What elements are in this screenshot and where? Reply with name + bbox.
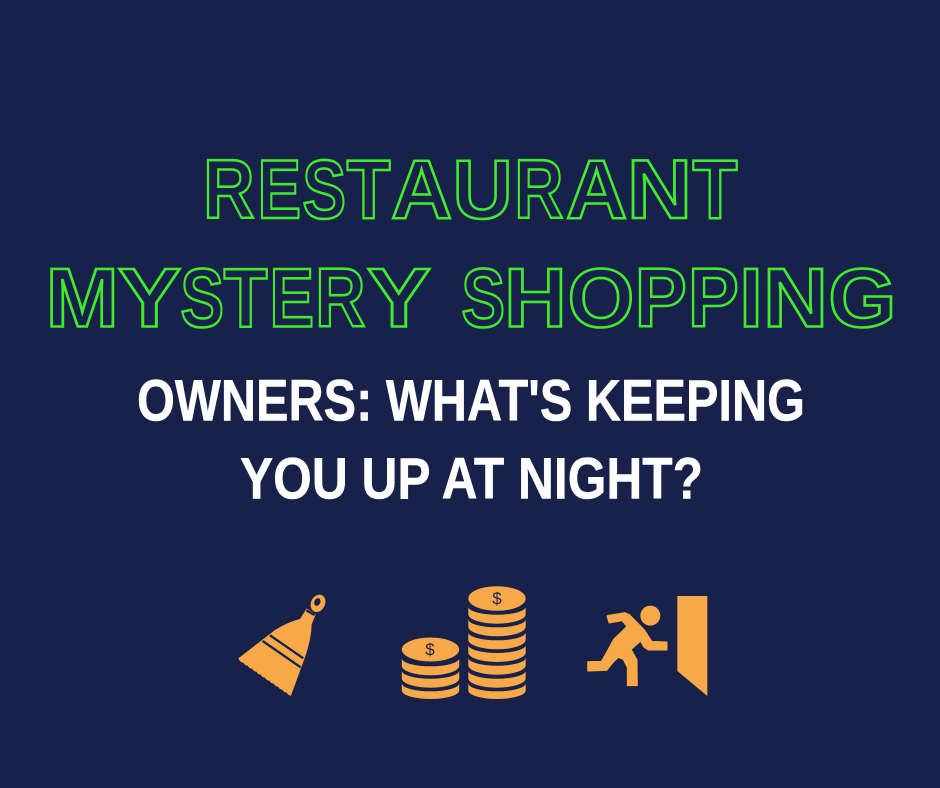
title line 2: H xyxy=(504,250,567,344)
dollar sign: $ xyxy=(492,589,502,608)
subtitle xyxy=(137,368,805,512)
dollar sign: $ xyxy=(425,640,435,659)
title line 2: M xyxy=(46,250,119,344)
icon: broom xyxy=(238,592,328,696)
subtitle line 2: YOU UP AT NIGHT? xyxy=(240,446,703,512)
title line 1: R xyxy=(514,142,563,236)
title line 1: U xyxy=(453,142,513,236)
title line 1: N xyxy=(627,142,692,236)
title line 1: A xyxy=(391,142,452,236)
title line 1: A xyxy=(566,142,627,236)
title line 2: R xyxy=(315,250,366,344)
title line 2: Y xyxy=(367,250,430,344)
title line 2: O xyxy=(568,250,634,344)
title line 1: T xyxy=(347,142,390,236)
title line 2: S xyxy=(180,250,224,344)
title line 2: E xyxy=(270,250,314,344)
title line 2: T xyxy=(224,250,268,344)
title xyxy=(46,142,896,344)
icon: running person at exit door xyxy=(588,596,707,696)
icon: large coin stack xyxy=(468,586,526,699)
title line 2: S xyxy=(461,250,505,344)
title line 1: R xyxy=(203,142,254,236)
title line 1: S xyxy=(302,142,346,236)
title line 1: T xyxy=(692,142,738,236)
title line 2: I xyxy=(739,250,763,344)
title line 1: E xyxy=(258,142,301,236)
subtitle line 1: OWNERS: WHAT'S KEEPING xyxy=(137,368,805,434)
title line 2: Y xyxy=(118,250,181,344)
title line 2: P xyxy=(635,250,687,344)
title line 2: N xyxy=(763,250,828,344)
title line 2: G xyxy=(828,250,896,344)
title line 2: P xyxy=(688,250,739,344)
icon: small coin stack xyxy=(402,638,459,699)
